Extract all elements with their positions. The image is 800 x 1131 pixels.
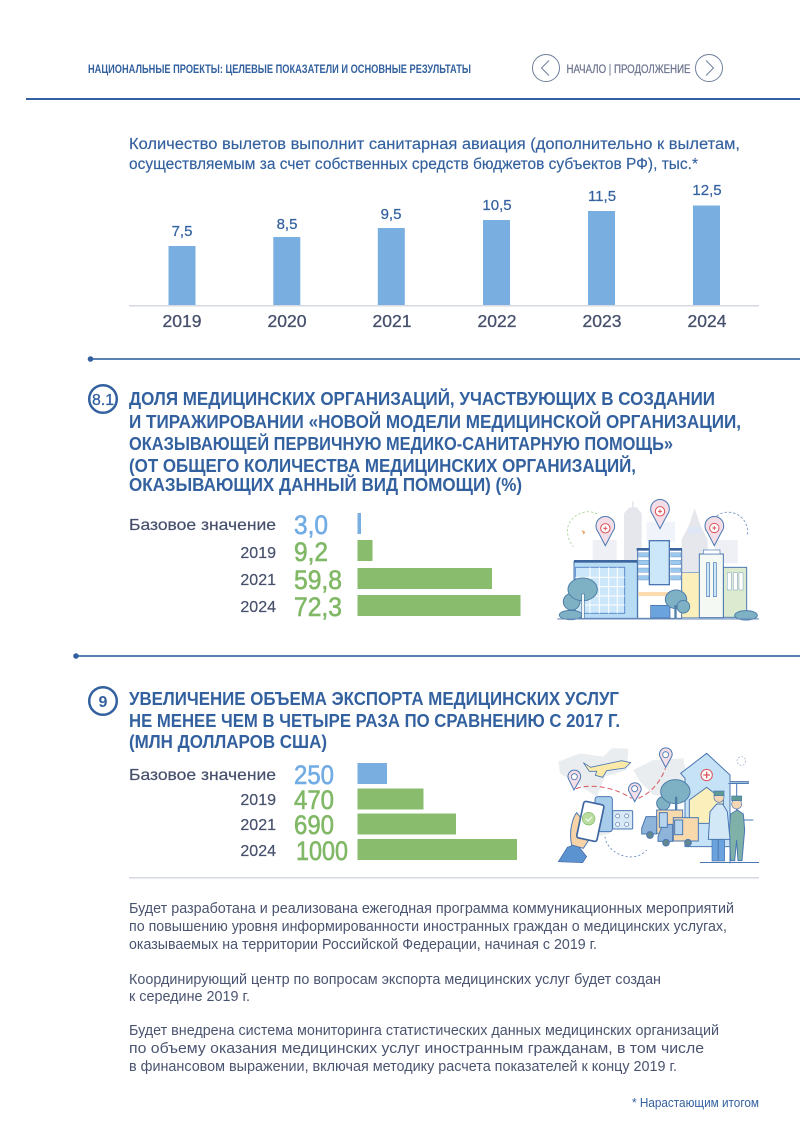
doctors <box>708 791 745 861</box>
plane <box>583 761 631 777</box>
bar chart: 2021 <box>373 311 411 331</box>
page header <box>88 54 722 82</box>
trucks <box>642 810 698 846</box>
paragraph: coordination center <box>129 971 661 1005</box>
paragraph: communication program: оказываемых на территории Российской Федерации, начиная с 2019 г. <box>129 936 597 953</box>
horizontal bar chart 8.1: Базовое значение <box>129 517 276 534</box>
bar chart: 10,5 <box>482 197 512 214</box>
section heading: (МЛН ДОЛЛАРОВ США) <box>129 731 327 752</box>
section 8.1 <box>89 385 759 622</box>
horizontal bar chart 8.1: 2021 <box>240 572 276 589</box>
horizontal bar chart 9: 690 <box>294 810 334 840</box>
horizontal bar chart 8.1: 59,8 <box>294 565 342 595</box>
illustration: medical export <box>558 748 759 863</box>
bar chart: 7,5 <box>172 223 192 240</box>
navigation text: НАЧАЛО | ПРОДОЛЖЕНИЕ <box>566 64 691 76</box>
number badge 8.1: 8.1 <box>92 392 114 409</box>
chart title <box>129 136 740 173</box>
horizontal bar chart 9: Базовое значение <box>129 767 276 784</box>
section heading: ОКАЗЫВАЮЩЕЙ ПЕРВИЧНУЮ МЕДИКО-САНИТАРНУЮ ПОМОЩЬ» <box>129 433 673 454</box>
number badge 9 <box>89 687 117 715</box>
number badge 9: 9 <box>99 694 108 711</box>
bar chart: 9,5 <box>381 206 401 223</box>
horizontal bar chart 8.1 <box>129 510 520 622</box>
horizontal bar chart 8.1: 2019 <box>240 545 276 562</box>
horizontal bar chart 8.1: 9,2 <box>294 537 328 567</box>
horizontal bar chart 8.1: 3,0 <box>294 510 328 540</box>
horizontal bar chart 9: 470 <box>294 785 334 815</box>
horizontal bar chart 8.1: 2024 <box>240 599 276 616</box>
section heading <box>129 688 620 752</box>
chart title: Количество вылетов выполнит санитарная авиация (дополнительно к вылетам, <box>129 136 740 153</box>
icon: previous arrow <box>532 54 560 82</box>
bar chart: 2019 <box>163 311 201 331</box>
horizontal bar chart 9: 2019 <box>240 792 276 809</box>
icon: next arrow <box>696 54 722 82</box>
pills and phone <box>595 797 612 832</box>
footnote: * Нарастающим итогом <box>632 1096 759 1110</box>
chart title: осуществляемым за счет собственных средств бюджетов субъектов РФ), тыс.* <box>129 156 698 173</box>
paragraph: monitoring system: Будет внедрена система мониторинга статистических данных медицинских организаций <box>129 1022 719 1039</box>
bar chart <box>129 182 759 331</box>
paragraph: communication program: Будет разработана и реализована ежегодная программа коммуникационных мероприятий <box>129 900 734 917</box>
header title: НАЦИОНАЛЬНЫЕ ПРОЕКТЫ: ЦЕЛЕВЫЕ ПОКАЗАТЕЛИ И ОСНОВНЫЕ РЕЗУЛЬТАТЫ <box>88 64 471 76</box>
paragraph: monitoring system: по объему оказания медицинских услуг иностранным гражданам, в том числе <box>129 1040 704 1057</box>
paragraph: coordination center: Координирующий центр по вопросам экспорта медицинских услуг будет создан <box>129 971 661 988</box>
horizontal bar chart 9: 2024 <box>240 843 276 860</box>
illustration: city hospital buildings <box>557 500 759 620</box>
paragraph: communication program <box>129 900 734 953</box>
horizontal bar chart 9: 250 <box>294 760 334 790</box>
section heading: (ОТ ОБЩЕГО КОЛИЧЕСТВА МЕДИЦИНСКИХ ОРГАНИЗАЦИЙ, <box>129 455 636 476</box>
number badge 8.1 <box>89 385 117 413</box>
horizontal bar chart 9 <box>129 760 517 866</box>
section heading <box>129 388 741 495</box>
bar chart: 12,5 <box>692 182 722 199</box>
horizontal bar chart 8.1: 72,3 <box>294 592 342 622</box>
horizontal bar chart 9: 2021 <box>240 817 276 834</box>
section heading: НЕ МЕНЕЕ ЧЕМ В ЧЕТЫРЕ РАЗА ПО СРАВНЕНИЮ С 2017 Г. <box>129 710 620 731</box>
chart section: sanitary aviation <box>129 136 759 331</box>
section heading: ДОЛЯ МЕДИЦИНСКИХ ОРГАНИЗАЦИЙ, УЧАСТВУЮЩИХ В СОЗДАНИИ <box>129 388 715 409</box>
bar chart: 2023 <box>583 311 621 331</box>
bar chart: 2024 <box>688 311 727 331</box>
section 9 <box>89 687 759 866</box>
bar chart: 2020 <box>268 311 307 331</box>
paragraphs <box>129 900 734 1075</box>
paragraph: communication program: по повышению уровня информированности иностранных граждан о медицинских услугах, <box>129 918 727 935</box>
paragraph: monitoring system <box>129 1022 719 1075</box>
section heading: И ТИРАЖИРОВАНИИ «НОВОЙ МОДЕЛИ МЕДИЦИНСКОЙ ОРГАНИЗАЦИИ, <box>129 411 741 432</box>
paragraph: coordination center: к середине 2019 г. <box>129 988 250 1005</box>
bar chart: 8,5 <box>277 216 297 233</box>
pins <box>568 748 672 802</box>
section heading: ОКАЗЫВАЮЩИХ ДАННЫЙ ВИД ПОМОЩИ) (%) <box>129 474 522 495</box>
paragraph: monitoring system: в финансовом выражении, включая методику расчета показателей к концу 2019 г. <box>129 1058 677 1075</box>
bar chart: 2022 <box>478 311 516 331</box>
bar chart: 11,5 <box>588 188 616 205</box>
horizontal bar chart 9: 1000 <box>296 836 348 866</box>
section heading: УВЕЛИЧЕНИЕ ОБЪЕМА ЭКСПОРТА МЕДИЦИНСКИХ УСЛУГ <box>129 688 619 709</box>
